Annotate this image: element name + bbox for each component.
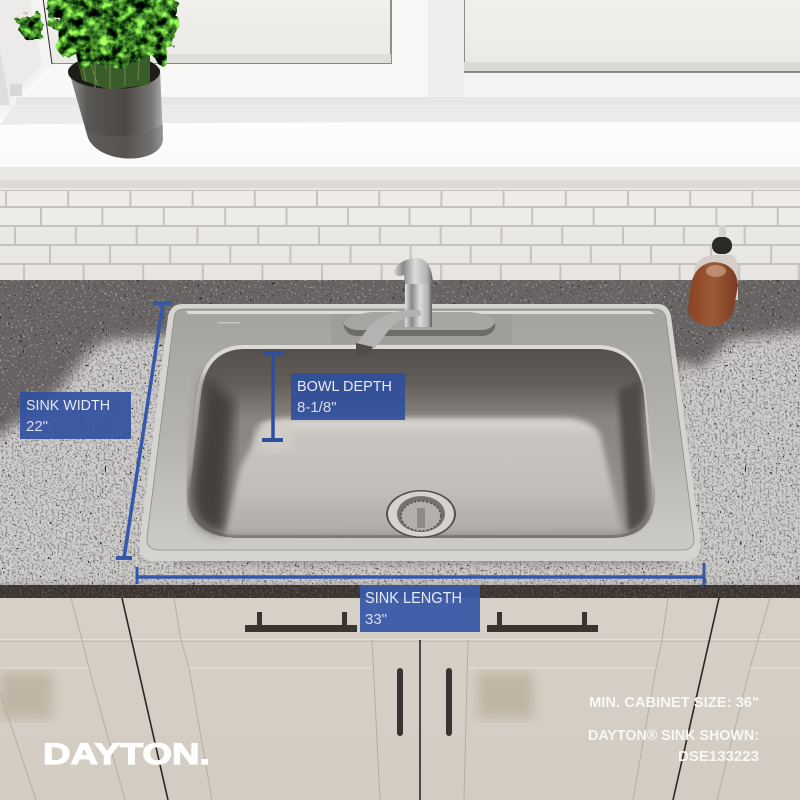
window frame — [0, 0, 800, 130]
cabinets — [0, 598, 800, 800]
callout: sink width: SINK WIDTH — [26, 398, 110, 414]
spec text: DAYTON® SINK SHOWN: — [588, 727, 759, 744]
dimension line: bowl depth — [262, 353, 284, 440]
left door handle — [397, 668, 403, 736]
counter front edge — [0, 585, 800, 598]
maker mark — [218, 322, 240, 324]
spec text: MIN. CABINET SIZE: 36" — [589, 694, 759, 711]
callout: sink length: SINK LENGTH — [365, 590, 462, 607]
left drawer handle — [245, 612, 357, 632]
spec text — [588, 694, 759, 765]
stainless steel sink — [140, 258, 700, 561]
right door handle — [446, 668, 452, 736]
foliage — [14, 0, 178, 90]
callout: sink width: 22" — [26, 418, 48, 435]
granite countertop — [0, 280, 800, 598]
drawer fronts — [0, 598, 800, 800]
sink rim — [140, 304, 700, 561]
subway tile backsplash — [0, 190, 800, 282]
callout: bowl depth: BOWL DEPTH — [297, 379, 392, 395]
bowl floor — [226, 418, 622, 534]
cabinet door gaps — [122, 598, 719, 800]
bowl — [187, 345, 655, 538]
left window pane — [43, 0, 391, 64]
bowl side walls — [191, 375, 235, 533]
callout: sink length: 33" — [365, 611, 387, 628]
dimension line: sink length — [137, 563, 705, 585]
pot — [68, 55, 163, 159]
faucet deck recess — [331, 314, 512, 344]
plant in pot — [14, 0, 178, 159]
spec text: DSE133223 — [678, 748, 759, 765]
callout: sink length — [360, 585, 480, 632]
drain — [386, 490, 456, 538]
window sill — [0, 105, 800, 190]
callout: sink width — [20, 392, 131, 439]
cabinet shadows — [0, 672, 533, 718]
right drawer handle — [487, 612, 598, 632]
callout: bowl depth: 8-1/8" — [297, 399, 337, 416]
dimension line: sink width — [116, 303, 172, 558]
soap dispenser — [688, 225, 738, 326]
faucet — [343, 258, 495, 355]
right window pane — [464, 0, 800, 72]
callout: bowl depth — [291, 373, 405, 420]
logo: DAYTON: DAYTON. — [43, 738, 210, 771]
